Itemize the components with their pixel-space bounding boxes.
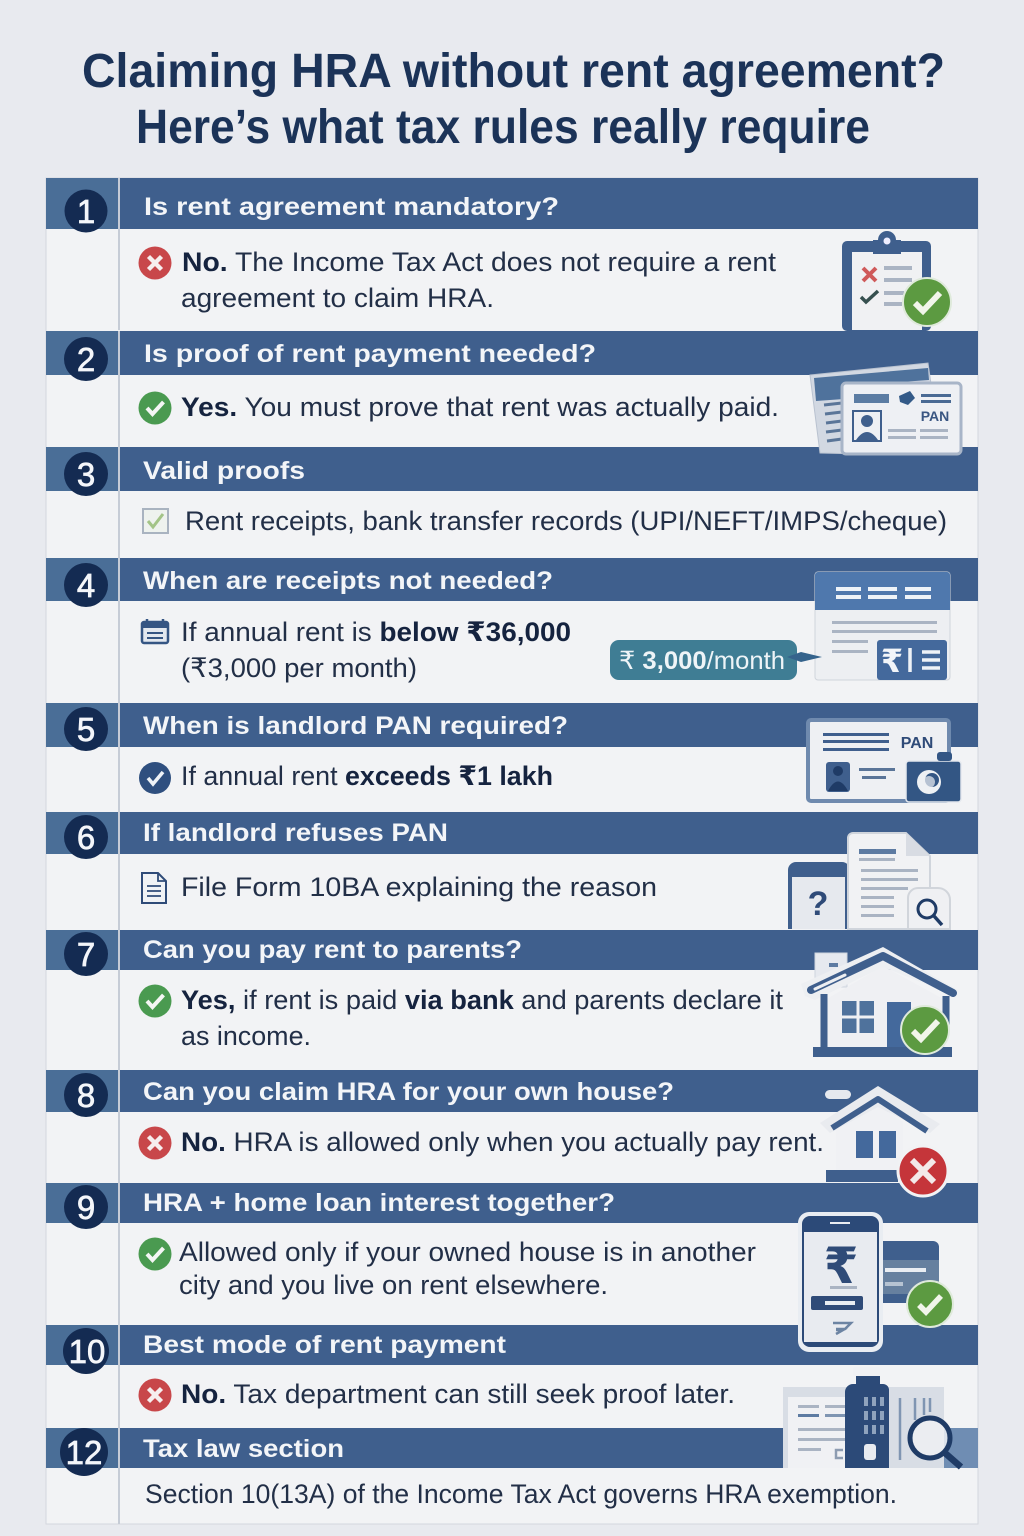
icon: PAN card and camera	[808, 720, 961, 802]
row 1: is rent agreement mandatory: 1	[77, 193, 95, 230]
row 9: HRA + home loan interest	[46, 1183, 978, 1325]
title	[82, 45, 945, 154]
icon: house with check	[801, 947, 958, 1057]
row 2: proof of rent payment: Is proof of rent payment needed?	[144, 340, 596, 368]
icon: receipt	[815, 572, 950, 680]
icon: checkbox	[143, 509, 168, 533]
icon: document, office building and magnifier	[783, 1367, 978, 1468]
title: Claiming HRA without rent agreement?	[82, 45, 945, 98]
row 1: is rent agreement mandatory: Is rent agreement mandatory?	[144, 193, 559, 221]
row 3: valid proofs: Valid proofs	[143, 457, 305, 485]
row 5: when landlord PAN required: 5	[77, 711, 95, 748]
icon: receipt: ₹	[881, 643, 903, 679]
icon: phone, document and magnifier	[788, 833, 950, 929]
row 8: HRA for own house	[46, 1070, 978, 1183]
icon: house with cross	[820, 1086, 948, 1196]
icon: PAN card and camera: PAN	[901, 735, 933, 752]
row 8: HRA for own house: 8	[77, 1077, 95, 1114]
row 4: when receipts not needed: 4	[77, 567, 95, 604]
panel: list of rules	[46, 178, 978, 1524]
row 12: tax law section: 12	[66, 1434, 102, 1471]
icon: phone payment with check	[798, 1212, 953, 1352]
row 2: proof of rent payment: Yes. You must prove that rent was actually paid.	[181, 392, 779, 422]
row 7: pay rent to parents: Yes, if rent is paid via bank and parents declare it	[181, 985, 783, 1015]
row 9: HRA + home loan interest: city and you live on rent elsewhere.	[179, 1270, 608, 1300]
row 7: pay rent to parents: Can you pay rent to parents?	[143, 936, 522, 964]
row 6: if landlord refuses PAN: File Form 10BA explaining the reason	[181, 872, 657, 902]
row 9: HRA + home loan interest: 9	[77, 1189, 95, 1226]
icon: phone, document and magnifier: ?	[808, 885, 828, 923]
icon: clipboard with check	[842, 231, 951, 331]
row 9: HRA + home loan interest: Allowed only if your owned house is in another	[179, 1237, 756, 1267]
row 2: proof of rent payment	[46, 331, 978, 447]
row 5: when landlord PAN required: When is landlord PAN required?	[143, 712, 568, 740]
row 12: tax law section: Section 10(13A) of the Income Tax Act governs HRA exemption.	[145, 1479, 897, 1509]
row 10: best mode of rent payment	[46, 1325, 978, 1428]
row 6: if landlord refuses PAN: If landlord refuses PAN	[143, 819, 448, 847]
row 1: is rent agreement mandatory: agreement to claim HRA.	[181, 283, 494, 313]
row 10: best mode of rent payment: Best mode of rent payment	[143, 1331, 507, 1359]
callout: 3,000 per month: ₹ 3,000/month	[619, 647, 785, 675]
title: Here’s what tax rules really require	[136, 101, 870, 154]
row 12: tax law section	[46, 1428, 978, 1524]
row 7: pay rent to parents	[46, 930, 978, 1070]
row 8: HRA for own house: Can you claim HRA for your own house?	[143, 1078, 674, 1106]
row 3: valid proofs: 3	[77, 456, 95, 493]
icon: phone payment with check: ₹	[824, 1238, 858, 1294]
icon: PAN cards	[810, 363, 961, 454]
row 10: best mode of rent payment: No. Tax department can still seek proof later.	[181, 1379, 735, 1409]
row 5: when landlord PAN required	[46, 703, 978, 812]
callout: 3,000 per month	[610, 640, 822, 680]
icon: check badge	[139, 762, 171, 794]
row 1: is rent agreement mandatory: No. The Income Tax Act does not require a rent	[182, 247, 777, 277]
row 7: pay rent to parents: 7	[77, 936, 95, 973]
row 5: when landlord PAN required: If annual rent exceeds ₹1 lakh	[181, 761, 553, 791]
row 4: when receipts not needed: (₹3,000 per month)	[181, 653, 417, 683]
row 9: HRA + home loan interest: HRA + home loan interest together?	[143, 1189, 615, 1217]
row 4: when receipts not needed	[46, 558, 978, 703]
row 6: if landlord refuses PAN	[46, 812, 978, 930]
row 8: HRA for own house: No. HRA is allowed only when you actually pay rent.	[181, 1127, 824, 1157]
row 10: best mode of rent payment: 10	[69, 1333, 105, 1370]
icon: PAN cards: PAN	[921, 408, 949, 424]
row 4: when receipts not needed: When are receipts not needed?	[143, 567, 553, 595]
row 3: valid proofs: Rent receipts, bank transfer records (UPI/NEFT/IMPS/cheque)	[185, 506, 947, 536]
row 1: is rent agreement mandatory	[46, 178, 978, 330]
row 3: valid proofs	[46, 447, 978, 558]
icon: document	[142, 873, 166, 903]
row 4: when receipts not needed: If annual rent is below ₹36,000	[181, 617, 571, 647]
row 12: tax law section: Tax law section	[143, 1435, 344, 1463]
row 6: if landlord refuses PAN: 6	[77, 819, 95, 856]
icon: calendar	[142, 619, 168, 643]
row 2: proof of rent payment: 2	[77, 341, 95, 378]
row 7: pay rent to parents: as income.	[181, 1021, 311, 1051]
